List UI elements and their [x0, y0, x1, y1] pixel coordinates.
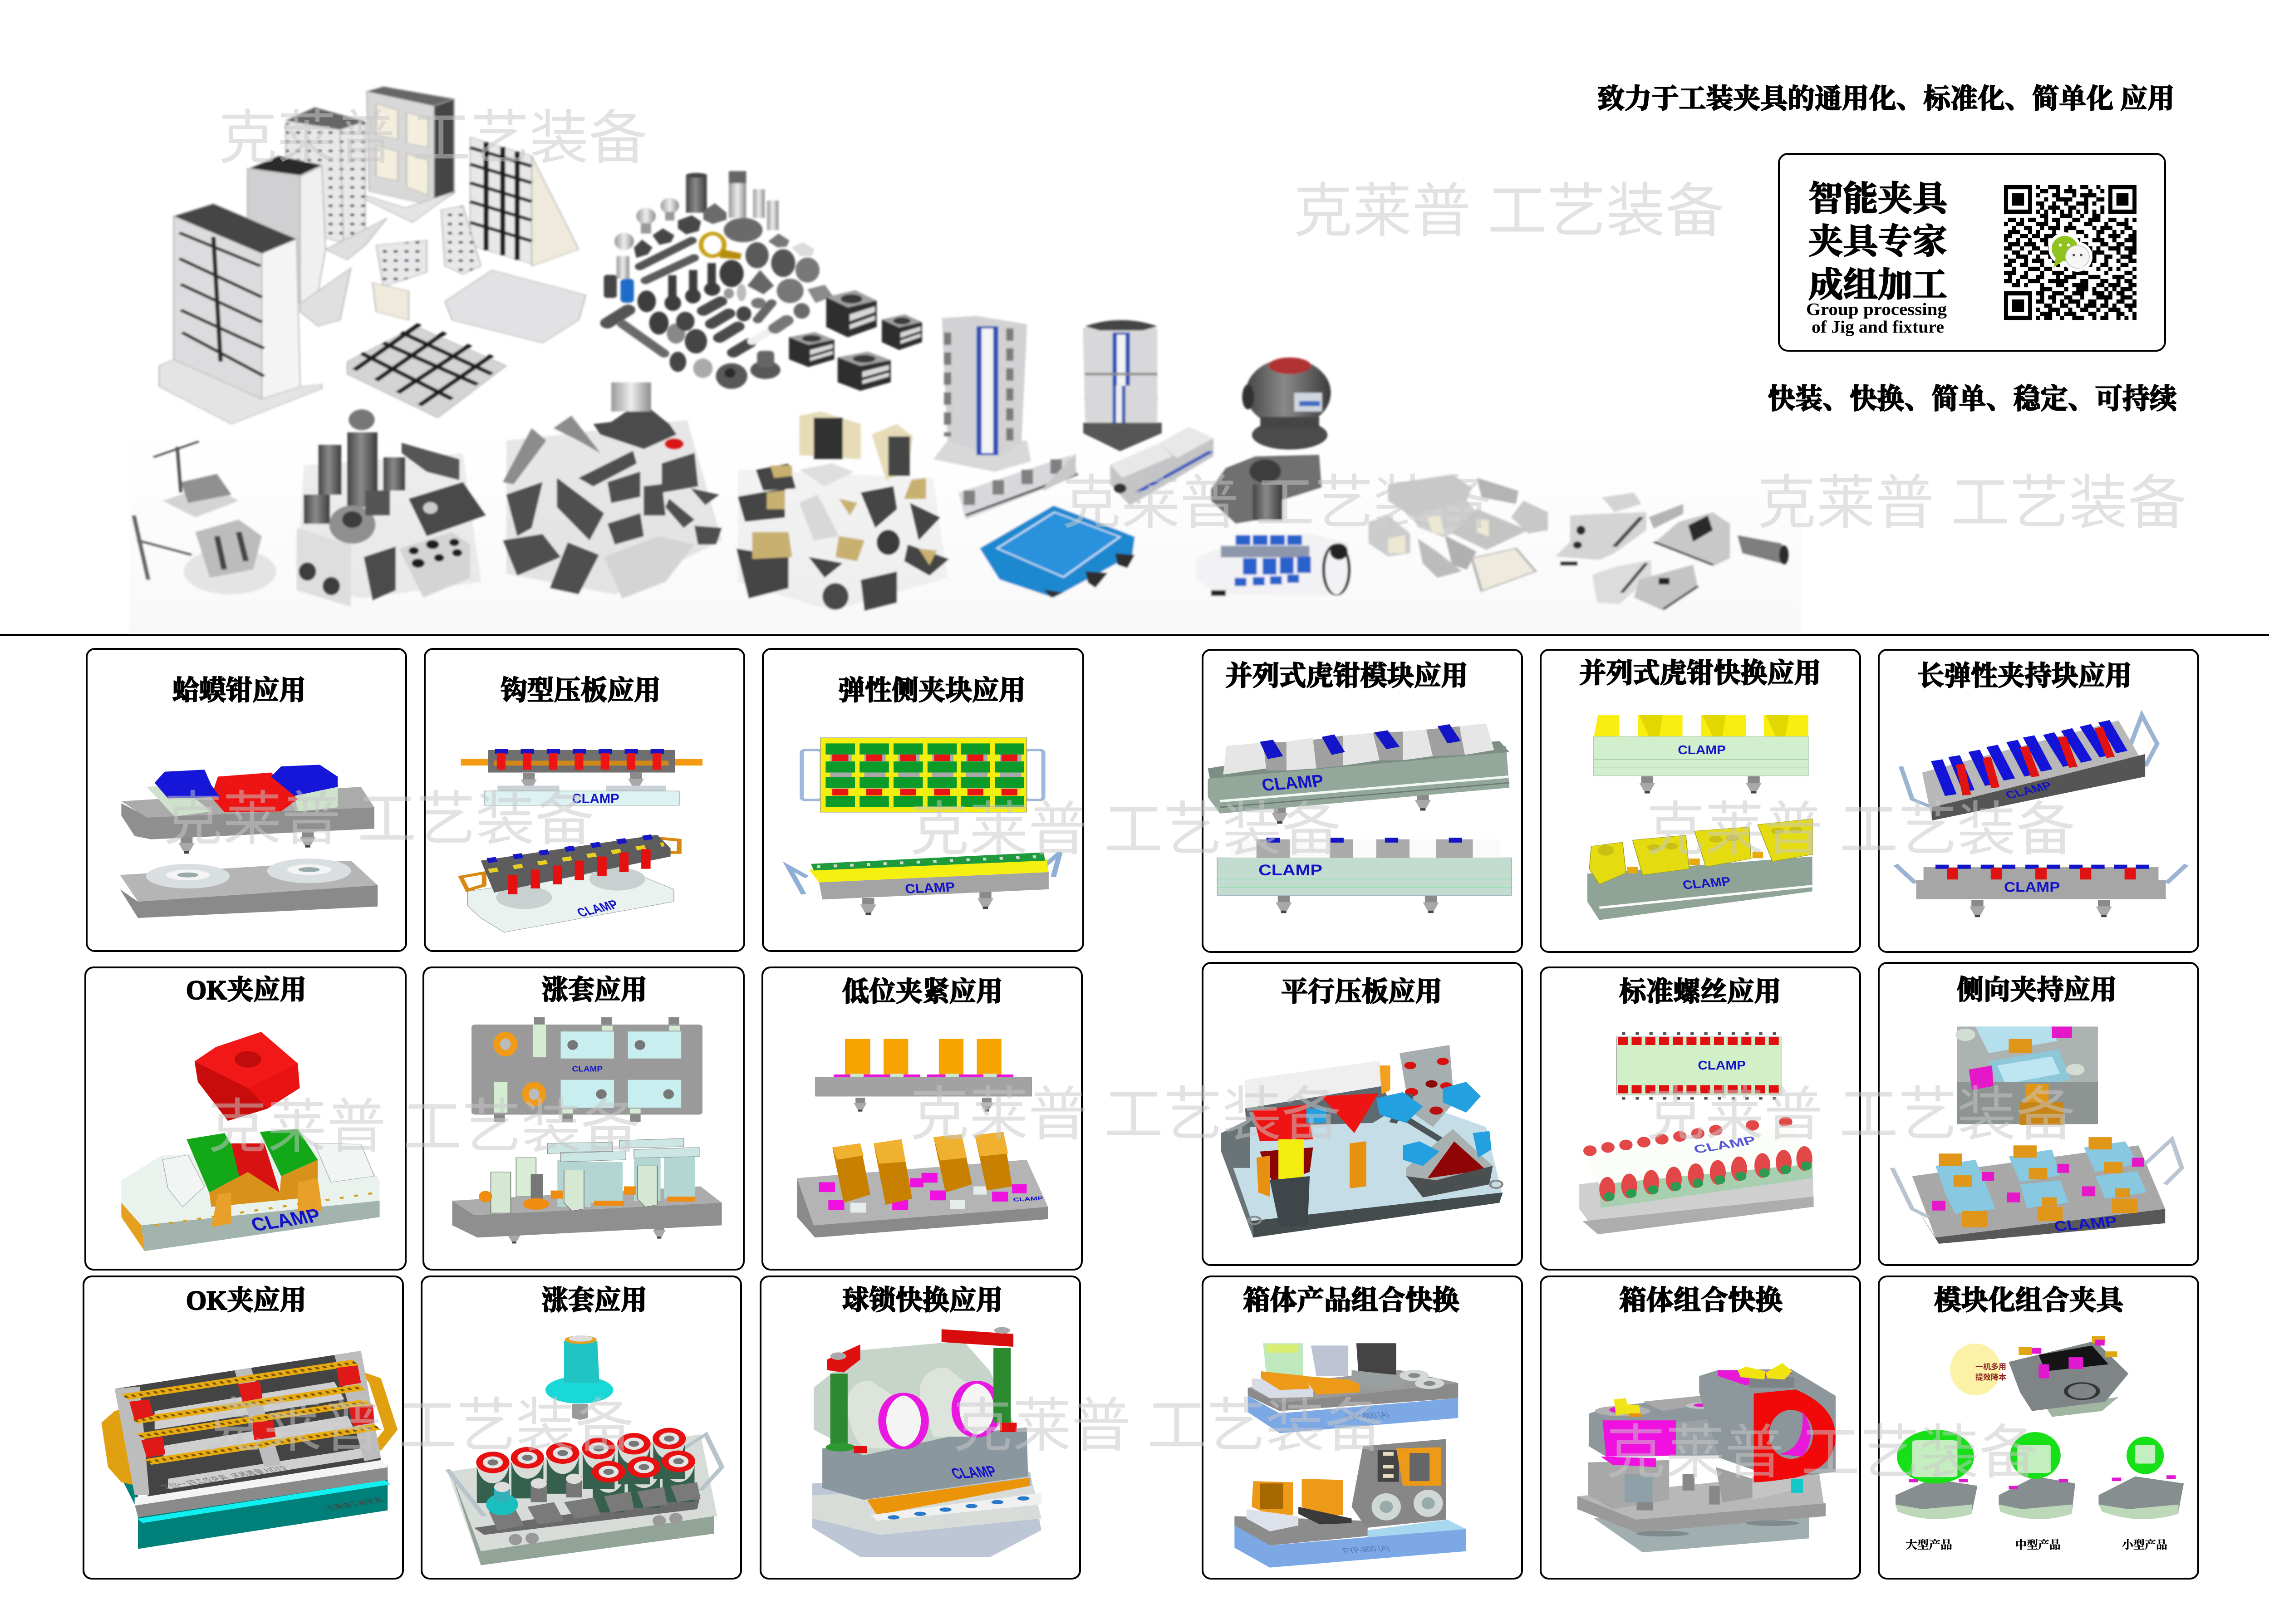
- heading: 平行压板应用: [1281, 977, 1442, 1007]
- fixture drawing: [788, 738, 1060, 915]
- fixture drawing: [101, 1351, 398, 1549]
- panel: 蛤蟆钳应用: [87, 649, 406, 951]
- group: bolts studs and clamp hardware: [604, 171, 922, 391]
- lower assembly: FYP-800 (A): [1341, 1543, 1391, 1555]
- label: CLAMP: [572, 1065, 603, 1073]
- panel: 弹性侧夹块应用: [763, 649, 1083, 951]
- precision vises: [1555, 492, 1789, 611]
- watermarks: 克莱普 工艺装备: [204, 1393, 634, 1459]
- watermarks: 克莱普 工艺装备: [910, 1081, 1341, 1148]
- large chuck with handle: [134, 515, 276, 594]
- panel: 并列式虎钳快换应用: [1541, 650, 1860, 952]
- heading: 涨套应用: [542, 1285, 647, 1315]
- watermarks: [163, 105, 2187, 1486]
- fixture drawing: [452, 1017, 722, 1243]
- panel: 长弹性夹持块应用: [1879, 650, 2198, 952]
- tower with plate cutouts: [365, 87, 456, 222]
- expansion sleeve tool: [545, 1335, 613, 1420]
- panel: 球锁快换应用: [761, 1276, 1080, 1579]
- label: CLAMP: [572, 791, 619, 806]
- watermarks: 克莱普 工艺装备: [1293, 178, 1724, 244]
- group: quick change parts and brackets: [980, 386, 1789, 611]
- fixture drawing: [1579, 1034, 1814, 1234]
- green medium product: [1999, 1432, 2075, 1519]
- label: CLAMP: [1681, 874, 1732, 892]
- green large product: [1896, 1430, 1977, 1519]
- angled bolts: [607, 240, 787, 353]
- fixture drawing: [1892, 1026, 2182, 1244]
- second LEAVE tower: [1083, 319, 1157, 424]
- small chuck: [153, 442, 239, 517]
- fixture drawing: [797, 1039, 1048, 1237]
- label: CLAMP: [2003, 779, 2055, 801]
- engraved company label: 克莱普工装夹具: [323, 1496, 386, 1511]
- slogan top: 致力于工装夹具的通用化、标准化、简单化 应用: [1597, 84, 2175, 114]
- pale photo backgrounds: [129, 408, 1802, 633]
- panel: OK夹应用 second: [83, 1276, 403, 1579]
- panel: 侧向夹持应用: [1879, 963, 2198, 1265]
- small fixture blocks: [373, 206, 481, 320]
- panel: 模块化组合夹具: [1879, 1276, 2198, 1579]
- group: lower photo row of chucks and clamps: [134, 316, 1157, 611]
- label: CLAMP: [1698, 1059, 1746, 1073]
- heading: OK夹应用: [186, 1285, 306, 1315]
- english caption line one: Group processing: [1806, 300, 1947, 319]
- product photo collage: [129, 87, 1802, 633]
- product size label medium: 中型产品: [2015, 1539, 2061, 1551]
- panel: 平行压板应用: [1203, 963, 1522, 1265]
- grid plate: [347, 324, 506, 418]
- fixture drawing: [1896, 1336, 2184, 1519]
- socket screws and domes: [638, 242, 833, 334]
- perforated tower: [286, 107, 387, 260]
- fixture drawing: [461, 749, 702, 932]
- watermarks: 克莱普 工艺装备: [1646, 796, 2075, 863]
- heading: 球锁快换应用: [842, 1285, 1003, 1315]
- label: CLAMP: [248, 1204, 324, 1235]
- fixture drawing: [1587, 715, 1812, 920]
- heading: 涨套应用: [542, 975, 647, 1005]
- tall T slot tower: [159, 204, 322, 424]
- watermarks: 克莱普 工艺装备: [1606, 1419, 2038, 1486]
- base plate: [445, 270, 586, 343]
- fixture drawing: [121, 1032, 380, 1251]
- tower base: [1083, 386, 1162, 451]
- lower assembly: [1234, 1439, 1466, 1568]
- label: CLAMP: [1678, 743, 1726, 757]
- swing clamp: [1211, 455, 1321, 524]
- slogan lower: 快装、快换、简单、稳定、可持续: [1768, 383, 2178, 415]
- heading: 低位夹紧应用: [842, 977, 1003, 1007]
- collection of flange nuts: [737, 412, 949, 611]
- callout text line one: 一机多用: [1975, 1362, 2006, 1371]
- heading: 侧向夹持应用: [1957, 975, 2117, 1005]
- quick clamp blocks: [789, 290, 922, 391]
- square T slot tower: [247, 156, 351, 326]
- callout text line two: 提效降本: [1975, 1373, 2006, 1382]
- english caption line two: of Jig and fixture: [1812, 318, 1944, 337]
- card heading: 智能夹具: 智能夹具: [1808, 180, 1952, 218]
- LEAVE tower: [933, 316, 1031, 472]
- fixture drawing: [1208, 723, 1512, 913]
- heading: 并列式虎钳快换应用: [1579, 658, 1821, 688]
- label: CLAMP: [1013, 1196, 1044, 1203]
- heading: 蛤蟆钳应用: [172, 676, 306, 706]
- small parts: [604, 275, 781, 389]
- standing cylinders: [686, 171, 779, 230]
- watermarks: 克莱普 工艺装备: [218, 105, 648, 171]
- watermarks: 克莱普 工艺装备: [208, 1094, 640, 1160]
- white angle brackets: [1368, 474, 1548, 591]
- rail with vises: [958, 455, 1078, 520]
- label: CLAMP: [1692, 1134, 1758, 1156]
- gold eye bolt: [701, 234, 742, 259]
- top divider line: [0, 634, 2269, 636]
- label: CLAMP: [1260, 771, 1325, 795]
- label: CLAMP: [948, 1463, 1000, 1482]
- callout bubble: [1950, 1344, 2001, 1395]
- valve module: [1196, 534, 1349, 596]
- heading: 标准螺丝应用: [1619, 977, 1781, 1007]
- product size label small: 小型产品: [2122, 1539, 2167, 1551]
- fixture drawing: [447, 1335, 722, 1565]
- heading: 钩型压板应用: [501, 676, 661, 706]
- upper assembly: FYP-800 (A): [1344, 1410, 1391, 1422]
- panel: 标准螺丝应用: [1541, 967, 1860, 1270]
- heading: OK夹应用: [186, 975, 306, 1005]
- heading: 模块化组合夹具: [1934, 1285, 2127, 1315]
- watermarks: 克莱普 工艺装备: [163, 786, 594, 852]
- qr code: [2004, 187, 2136, 318]
- panel: OK夹应用: [85, 967, 406, 1270]
- group: dome clamp: [1242, 358, 1331, 427]
- panel: 箱体产品组合快换: [1203, 1276, 1522, 1579]
- watermarks: 克莱普 工艺装备: [1757, 470, 2187, 536]
- fixture drawing: [120, 765, 378, 918]
- heading: 箱体组合快换: [1619, 1285, 1783, 1315]
- panel: 并列式虎钳模块应用: [1203, 650, 1522, 952]
- heading: 箱体产品组合快换: [1243, 1285, 1459, 1315]
- collection of posts: [297, 409, 486, 607]
- upper assembly: [1248, 1343, 1458, 1433]
- dome base: [1252, 417, 1327, 450]
- watermarks: 克莱普 工艺装备: [1646, 1081, 2075, 1148]
- label: CLAMP: [574, 897, 621, 920]
- watermarks: 克莱普 工艺装备: [953, 1393, 1384, 1459]
- card heading: 成组加工: 成组加工: [1808, 266, 1947, 304]
- label: CLAMP: [2004, 879, 2060, 895]
- engraved fixture label: 工位一 四工位夹具_夹具重量 HD19: [158, 1464, 289, 1491]
- fixture drawing: [812, 1327, 1041, 1557]
- label: CLAMP: [2053, 1213, 2119, 1235]
- heading: 弹性侧夹块应用: [838, 676, 1026, 706]
- main assembly: [2009, 1336, 2128, 1417]
- watermarks: 克莱普 工艺装备: [910, 796, 1341, 863]
- fixture drawing: [1221, 1045, 1503, 1237]
- heading: 并列式虎钳模块应用: [1225, 661, 1468, 691]
- panel: 低位夹紧应用: [762, 967, 1082, 1270]
- blue plate: [980, 505, 1135, 598]
- T nuts and discs: [634, 203, 815, 258]
- close-up inset: [1955, 1026, 2098, 1125]
- fixture drawing: [1234, 1343, 1466, 1568]
- card heading: 夹具专家: 夹具专家: [1808, 223, 1947, 261]
- green small product: [2098, 1437, 2184, 1519]
- icon: wechat logo: [2048, 232, 2092, 272]
- panel: 箱体组合快换: [1541, 1276, 1860, 1579]
- watermarks: 克莱普 工艺装备: [1062, 470, 1492, 536]
- fixture drawing: [1577, 1363, 1836, 1552]
- product size label large: 大型产品: [1906, 1539, 1952, 1551]
- label: CLAMP: [1258, 861, 1322, 879]
- panel: 涨套应用 second: [422, 1276, 741, 1579]
- heading: 长弹性夹持块应用: [1917, 661, 2132, 691]
- collection of forks and T-nuts: [503, 383, 722, 599]
- fixture drawing: [1896, 715, 2186, 917]
- label: CLAMP: [904, 880, 956, 897]
- ball studs: [614, 198, 679, 279]
- panel: qr contact card: [1779, 154, 2165, 351]
- angle plate with grid: [470, 137, 579, 266]
- group: work holding towers and plates: [159, 87, 586, 424]
- panel: 钩型压板应用: [425, 649, 744, 951]
- twin vise: [1044, 427, 1213, 505]
- panel: 涨套应用: [423, 967, 744, 1270]
